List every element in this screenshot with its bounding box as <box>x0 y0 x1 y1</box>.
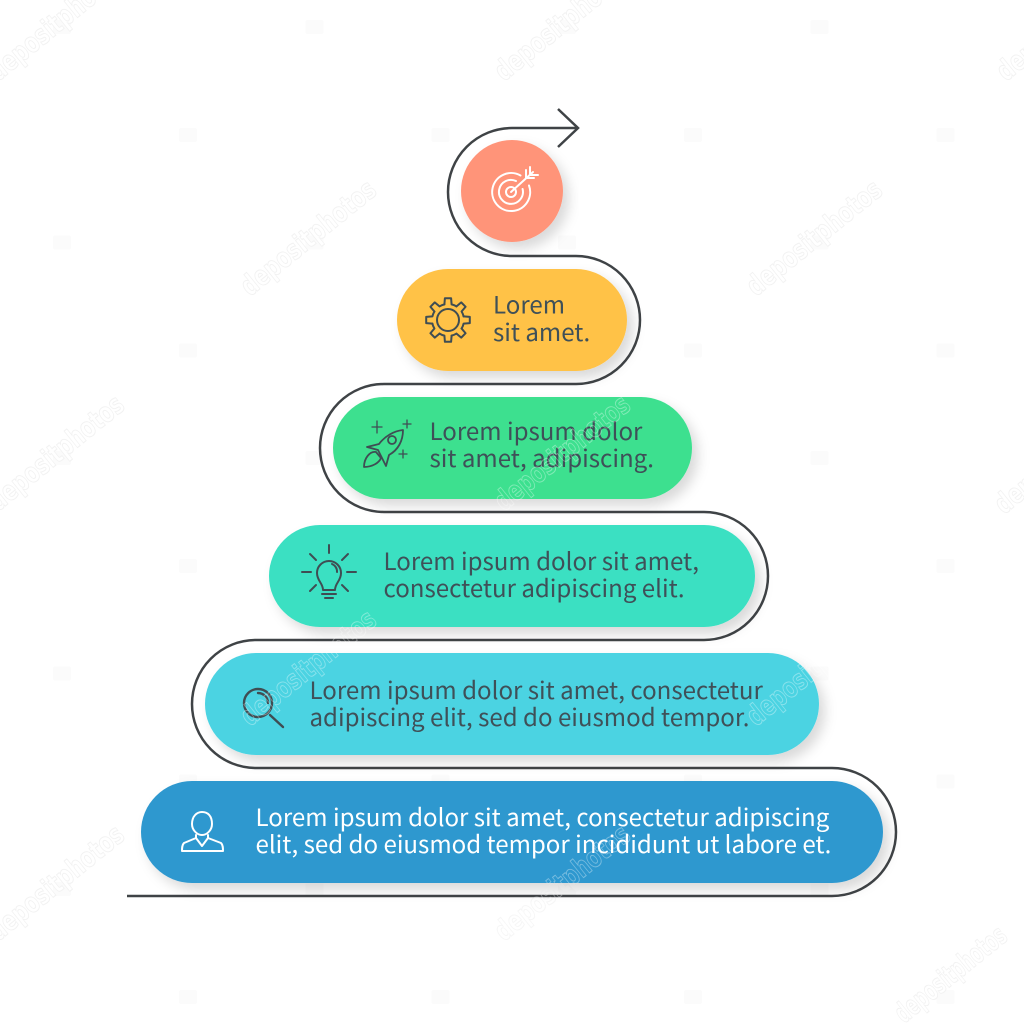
text: step 5: Lorem <box>493 286 565 320</box>
icon: gear <box>426 298 470 342</box>
icon: rocket stars <box>372 420 411 458</box>
watermarks on background: depositphotos <box>234 173 383 302</box>
watermark on pill: depositphotos <box>234 603 383 732</box>
watermarks on background: depositphotos <box>488 818 637 947</box>
step 5: yellow pill <box>397 269 627 371</box>
icon: target <box>492 167 538 211</box>
text: step 3: consectetur adipiscing elit. <box>384 569 685 604</box>
text: step 2: adipiscing elit, sed do eiusmod tempor. <box>310 698 749 733</box>
watermark on cyan pill right: depositphotos <box>740 603 889 732</box>
watermarks on background: depositphotos <box>740 173 889 302</box>
icon: light bulb <box>302 545 356 598</box>
winding path line with arrow <box>127 109 896 896</box>
watermark on green pill: depositphotos <box>488 388 637 517</box>
text: step 4: sit amet, adipiscing. <box>430 439 654 474</box>
step 4: green pill <box>333 397 692 499</box>
step 6: target circle <box>461 140 563 242</box>
icon: rocket <box>364 430 403 467</box>
text: step 5: sit amet. <box>493 313 590 348</box>
step 3: teal pill <box>269 525 755 627</box>
text: step 4: Lorem ipsum dolor <box>430 412 643 447</box>
text: step 1: Lorem ipsum dolor sit amet, consectetur adipiscing <box>256 798 830 833</box>
watermark on pill: depositphotos <box>488 818 637 947</box>
text: step 1: elit, sed do eiusmod tempor incididunt ut labore et. <box>256 825 831 860</box>
step 1: blue pill <box>141 781 883 947</box>
text: step 3: Lorem ipsum dolor sit amet, <box>384 542 699 577</box>
icon: person <box>182 812 223 851</box>
step 2: cyan pill <box>205 603 819 755</box>
text: step 2: Lorem ipsum dolor sit amet, consectetur <box>310 671 763 706</box>
icon: magnifier <box>244 689 283 727</box>
